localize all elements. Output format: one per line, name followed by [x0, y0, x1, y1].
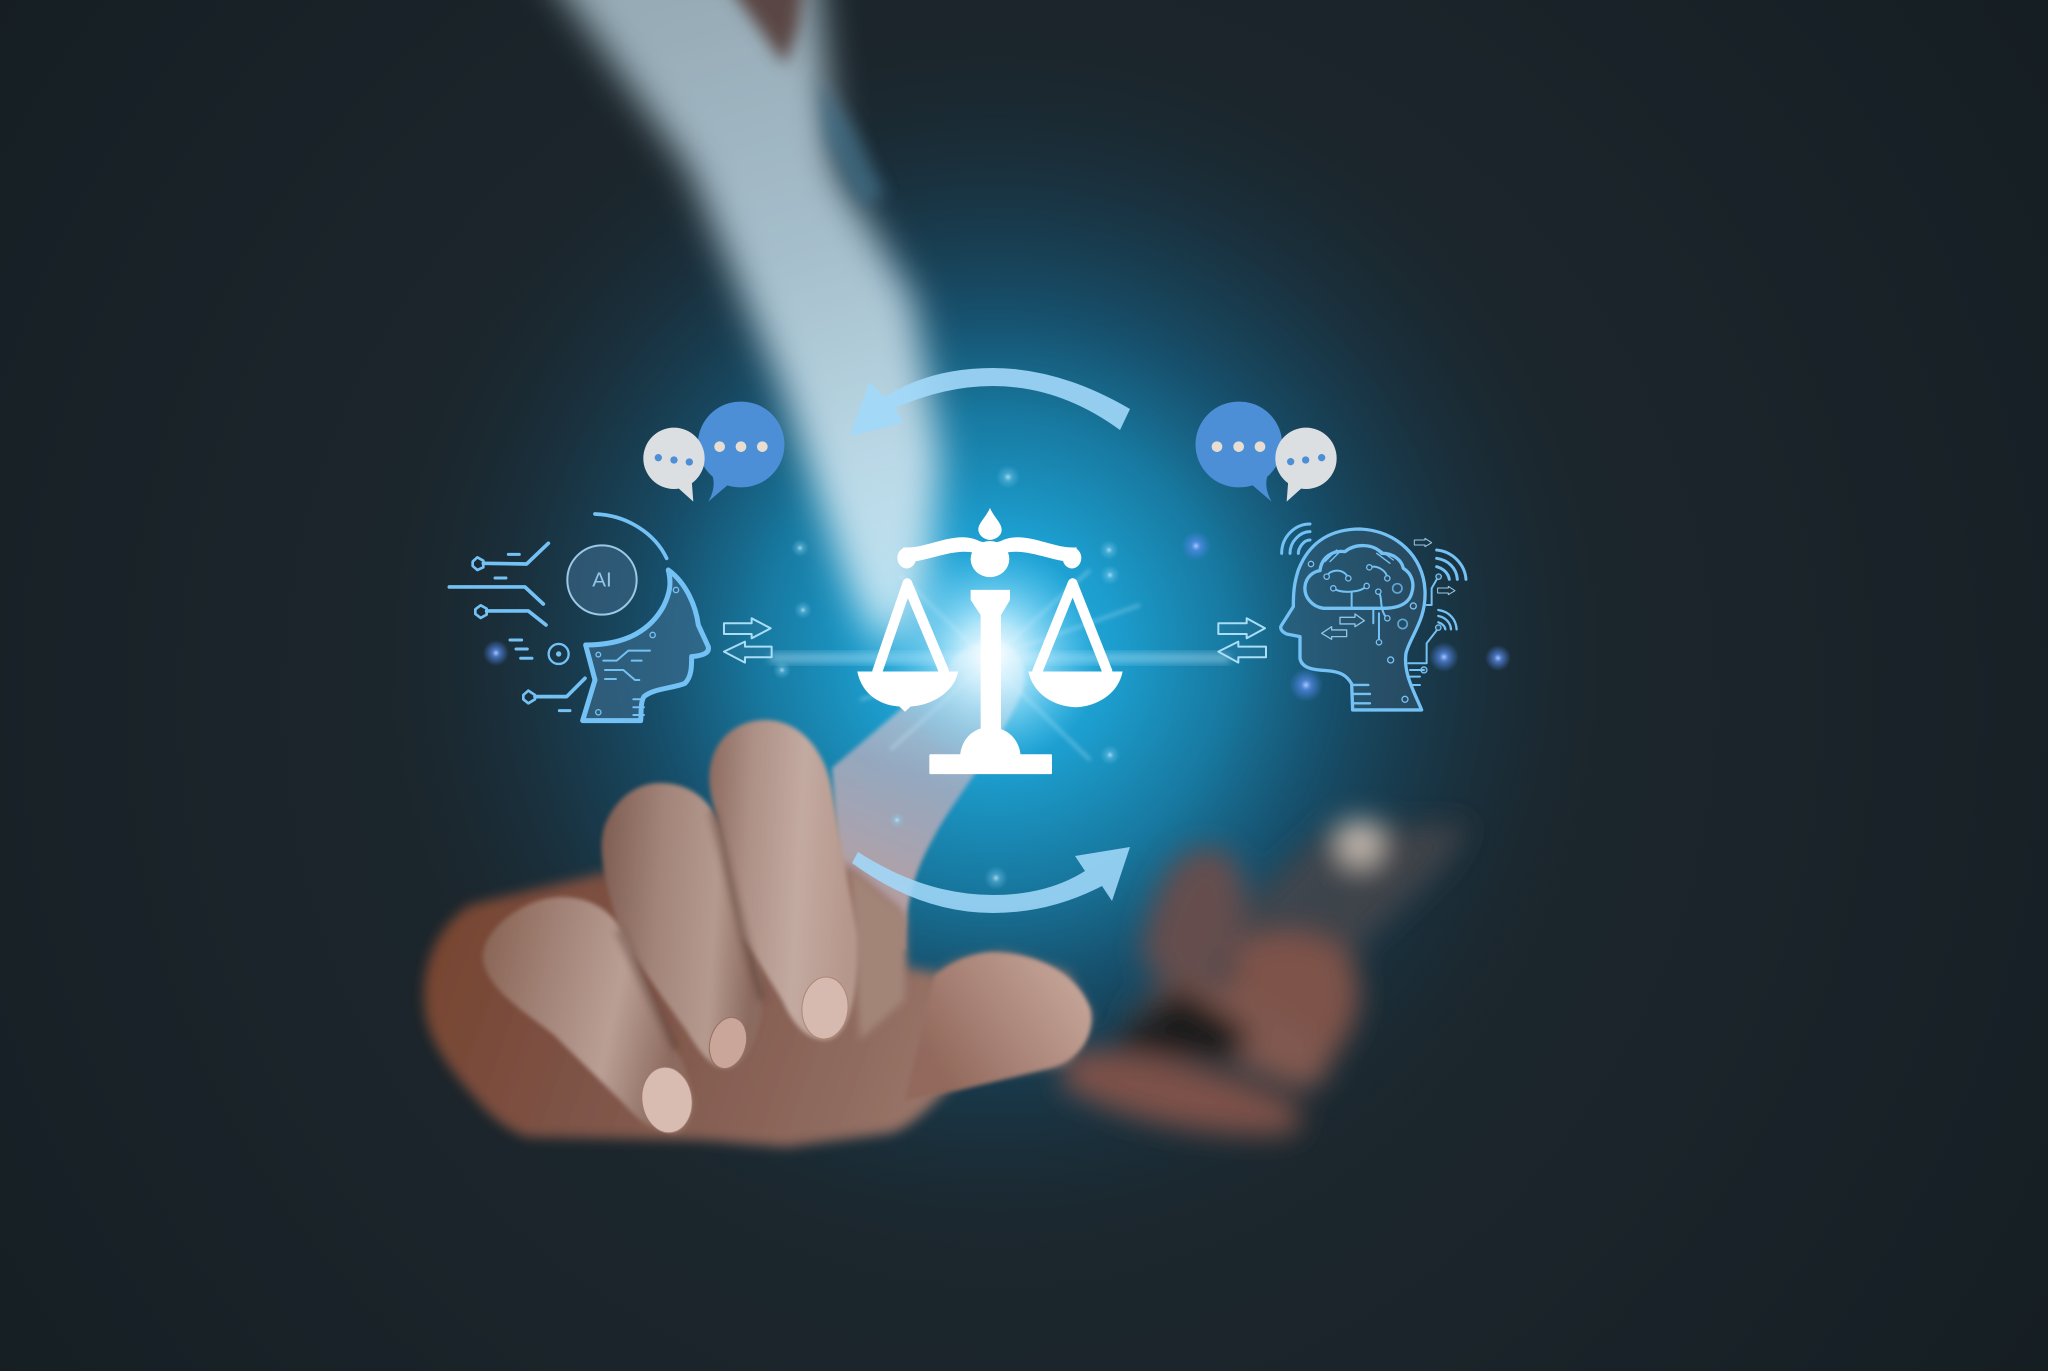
back fingers: [1140, 848, 1244, 1000]
left speech bubbles: [643, 402, 784, 502]
right speech bubbles: [1195, 402, 1337, 502]
top right signal: [1437, 550, 1466, 579]
cycle arrow: top: [850, 368, 1130, 436]
white bubble: [1275, 428, 1337, 489]
lower hand: [1060, 1050, 1301, 1135]
brain outline: [1305, 546, 1413, 608]
lens flare: [770, 545, 1230, 765]
head outline: [583, 570, 708, 721]
beam: [903, 537, 1077, 562]
finger base behind thumb: [850, 870, 905, 1040]
cycle arrow: bottom: [852, 847, 1130, 913]
blurred neck and shirt: [540, 0, 940, 670]
outer circuit nodes: [1436, 574, 1441, 630]
central teal glow: [375, 30, 1615, 1270]
base plate: [929, 754, 1052, 774]
top arc: [595, 514, 667, 558]
white bubble tail: [1287, 480, 1303, 502]
left arrow: [1218, 642, 1266, 663]
right arrow: [1218, 618, 1265, 638]
node near crown: [673, 587, 679, 593]
human hand: [424, 720, 1091, 1147]
palm and wrist: [424, 850, 1091, 1147]
thumb: [905, 952, 1091, 1100]
outer small arrow upper: [1414, 538, 1432, 547]
AI head icon: [449, 514, 708, 721]
right pan strings: [1037, 584, 1107, 671]
small nodes: [596, 652, 601, 657]
brain texture lines: [1325, 550, 1393, 563]
brain nodes: [1308, 561, 1427, 702]
node near forehead: [650, 632, 655, 638]
neck lines: [1353, 685, 1370, 703]
horizontal streak: [770, 653, 1230, 663]
inner arrow left: [1322, 627, 1347, 639]
white core: [882, 545, 1102, 765]
phone highlight: [1338, 819, 1382, 867]
lower right signal: [1438, 610, 1457, 629]
finger gap shadows: [618, 810, 762, 1050]
white bubble tail: [677, 480, 693, 502]
left pan: [857, 671, 958, 712]
finger two: [1230, 932, 1359, 1060]
gears: [1393, 584, 1407, 629]
blue bubble dots: [714, 441, 768, 452]
node at base: [596, 710, 601, 715]
neck: [725, 0, 805, 65]
circuit nodes: [473, 557, 535, 703]
sparkle particles: [483, 465, 1511, 890]
rays: [860, 570, 1140, 760]
outer small arrow lower: [1438, 586, 1455, 595]
beam hub: [971, 541, 1009, 577]
white bubble dots: [655, 454, 693, 466]
blue bubble dots: [1212, 441, 1265, 452]
outer circuits: [1408, 577, 1438, 685]
white bubble dots: [1287, 454, 1325, 465]
finial: [978, 508, 1002, 540]
nail: middle finger: [799, 975, 851, 1041]
short dashes: [495, 554, 570, 711]
nail: ring finger: [704, 1013, 752, 1073]
nail: little finger: [638, 1064, 696, 1136]
blurred second hand holding phone: [1060, 819, 1470, 1135]
left arrow: [724, 642, 772, 663]
base dome: [960, 727, 1021, 756]
phone: [1120, 825, 1470, 1040]
target center: [556, 651, 561, 657]
left beam end: [897, 547, 916, 568]
blue bubble: [1195, 402, 1282, 502]
head outline: [1281, 529, 1425, 710]
phone shadow: [1110, 985, 1250, 1059]
top left signal: [1282, 524, 1310, 553]
tie shadow: [820, 80, 885, 205]
right pan: [1028, 671, 1123, 707]
inner arrow right: [1340, 614, 1364, 627]
right beam end: [1063, 547, 1081, 568]
target circle: [549, 644, 569, 664]
translucent pointing finger: [832, 640, 1024, 950]
shirt collar band: [540, 0, 940, 670]
right exchange arrows: [1218, 618, 1266, 663]
left pan strings: [877, 584, 944, 671]
pillar: [971, 590, 1010, 734]
human brain head icon: [1281, 524, 1466, 710]
little finger: [483, 897, 694, 1134]
middle finger: [709, 720, 858, 1040]
AI label: AI: [592, 569, 612, 592]
left exchange arrows: [724, 618, 772, 663]
blue bubble: [698, 402, 784, 502]
finger three: [1155, 982, 1329, 1090]
ring finger: [602, 783, 762, 1068]
right arrow: [724, 618, 771, 638]
scales of justice icon: [857, 508, 1123, 774]
white bubble: [643, 428, 705, 489]
brain circuits: [1327, 567, 1387, 642]
circuit lines: [449, 543, 585, 697]
inner circuits: [603, 651, 650, 715]
AI circle: [567, 545, 637, 615]
